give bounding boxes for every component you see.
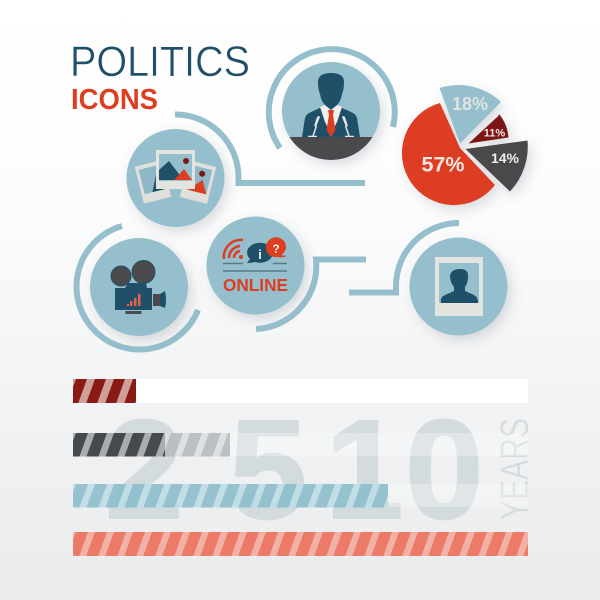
- pie label: 11%: 11%: [484, 128, 505, 140]
- background numerals 2 5 10: 0: [405, 390, 483, 548]
- bar: 5 years grey: [73, 433, 230, 456]
- background numerals 2 5 10: 2: [105, 390, 183, 548]
- slice: 57%: [402, 103, 495, 205]
- bar: full red: [73, 532, 528, 556]
- connector: speaker arc: [269, 49, 395, 148]
- icon: online: ONLINE: [223, 275, 288, 295]
- background numerals 2 5 10: 1: [325, 390, 403, 548]
- pie label: 57%: 57%: [421, 152, 465, 176]
- icon: speaker at podium: [282, 62, 380, 160]
- icon: photos: [126, 129, 224, 227]
- background numerals 2 5 10: 5: [229, 390, 307, 548]
- connector: online arc and line: [256, 260, 366, 329]
- connector: camera arc: [77, 226, 198, 350]
- track bands: [73, 379, 528, 507]
- connector: portrait arc and line: [349, 223, 459, 292]
- icon: video camera: [90, 238, 188, 336]
- pie label: 14%: 14%: [491, 150, 520, 166]
- connector: photos arc and line: [175, 114, 365, 183]
- icon: online: ?: [272, 242, 280, 256]
- slice: 18%: [440, 85, 501, 144]
- slice: 14%: [466, 140, 528, 192]
- slice: 11%: [468, 114, 508, 144]
- icon: online: i: [258, 247, 262, 262]
- icon: online: [206, 216, 304, 314]
- title: POLITICS: [70, 38, 250, 86]
- bar: 10 years blue: [73, 484, 388, 508]
- background numerals 2 5 10: [105, 390, 483, 548]
- icon: portrait photo: [410, 238, 508, 336]
- bar: 2 years dark red: [73, 379, 136, 403]
- subtitle: ICONS: [71, 84, 158, 116]
- rotated label: years: YEARS: [493, 418, 537, 520]
- pie chart: [402, 85, 528, 205]
- pie label: 18%: 18%: [452, 94, 488, 114]
